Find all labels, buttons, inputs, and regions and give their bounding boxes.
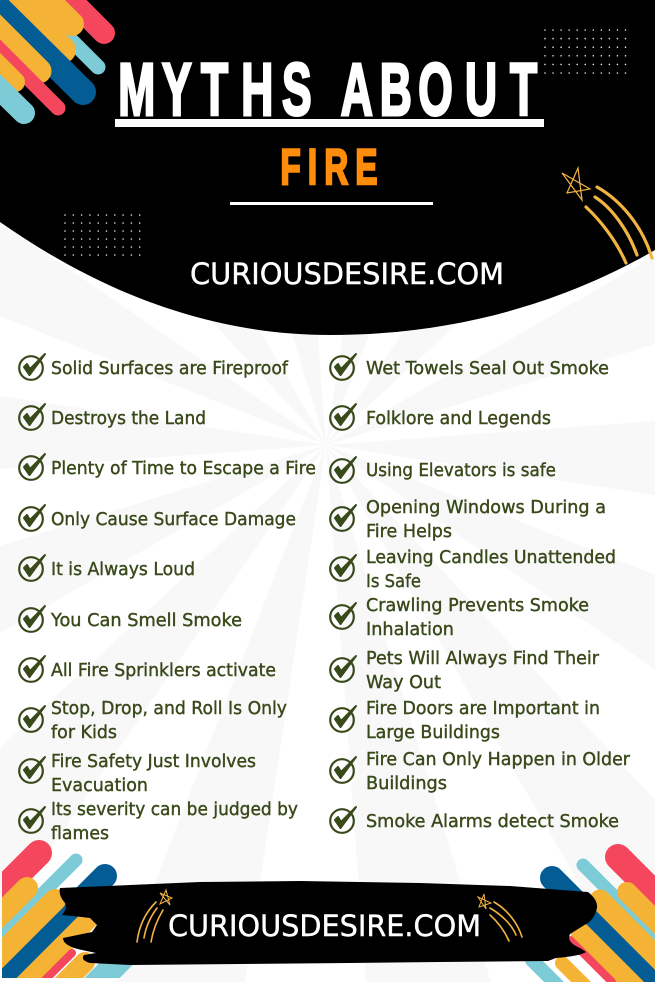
subtitle underline bbox=[230, 202, 433, 205]
right column list: Opening Windows During a bbox=[366, 498, 606, 518]
left column list: Plenty of Time to Escape a Fire bbox=[51, 459, 316, 479]
icon: shooting star bottom right bbox=[478, 894, 522, 941]
right column list: Fire Can Only Happen in Older bbox=[366, 750, 631, 770]
left column list: Its severity can be judged by bbox=[51, 800, 298, 820]
left column list: Only Cause Surface Damage bbox=[51, 510, 296, 530]
bottom brush banner bbox=[60, 881, 597, 965]
right column list: Fire Helps bbox=[366, 522, 452, 542]
right column list: Pets Will Always Find Their bbox=[366, 649, 600, 669]
left column list: Fire Safety Just Involves bbox=[51, 752, 256, 772]
dots top right bbox=[545, 30, 627, 73]
left column list: Evacuation bbox=[51, 776, 148, 796]
right column list: Leaving Candles Unattended bbox=[366, 548, 616, 568]
decoration: bottom-left stripes bbox=[0, 853, 125, 982]
left column list: for Kids bbox=[51, 723, 117, 743]
right column list: Inhalation bbox=[366, 620, 454, 640]
left column list bbox=[19, 354, 316, 844]
icon: shooting star bottom left bbox=[137, 890, 172, 942]
right column list: Folklore and Legends bbox=[366, 409, 551, 429]
decoration: top-left stripes bbox=[0, 0, 104, 113]
right column list bbox=[330, 354, 631, 833]
left column list: flames bbox=[51, 824, 109, 844]
left column list: It is Always Loud bbox=[51, 560, 195, 580]
dots left bbox=[65, 215, 142, 255]
icon: shooting star top right bbox=[562, 168, 652, 263]
left column list: Stop, Drop, and Roll Is Only bbox=[51, 699, 287, 719]
website top: CURIOUSDESIRE.COM bbox=[190, 257, 504, 291]
website bottom: CURIOUSDESIRE.COM bbox=[168, 909, 481, 943]
left column list: Destroys the Land bbox=[51, 409, 206, 429]
right column list: Wet Towels Seal Out Smoke bbox=[366, 359, 609, 379]
decoration: bottom-right stripes bbox=[532, 857, 655, 982]
subtitle: FIRE bbox=[281, 139, 385, 195]
right column list: Smoke Alarms detect Smoke bbox=[366, 812, 619, 832]
right column list: Using Elevators is safe bbox=[366, 461, 556, 481]
left column list: All Fire Sprinklers activate bbox=[51, 661, 276, 681]
right column list: Is Safe bbox=[366, 572, 421, 592]
header black curved panel bbox=[0, 0, 655, 335]
left column list: Solid Surfaces are Fireproof bbox=[51, 359, 289, 379]
right column list: Fire Doors are Important in bbox=[366, 699, 600, 719]
right column list: Crawling Prevents Smoke bbox=[366, 596, 589, 616]
title underline bbox=[115, 119, 544, 127]
left column list: You Can Smell Smoke bbox=[50, 611, 242, 631]
title: MYTHS ABOUT bbox=[118, 48, 537, 131]
right column list: Large Buildings bbox=[366, 723, 500, 743]
right column list: Way Out bbox=[366, 673, 441, 693]
right column list: Buildings bbox=[366, 774, 447, 794]
